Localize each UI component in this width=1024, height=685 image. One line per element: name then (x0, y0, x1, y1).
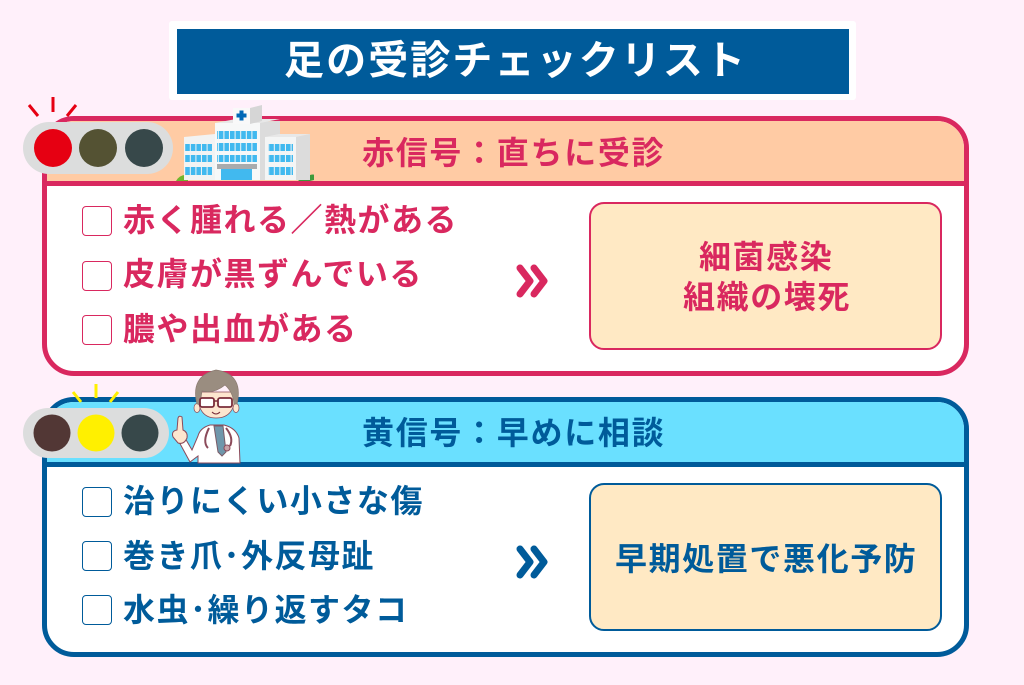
icon: yellow traffic light (23, 384, 169, 458)
icon: hospital building (176, 105, 314, 181)
yellow checklist: 治りにくい小さな傷 (123, 483, 424, 519)
red checklist (82, 202, 458, 347)
red checklist: 赤く腫れる／熱がある (123, 202, 458, 238)
red heading: 赤信号：直ちに受診 (362, 135, 665, 171)
icon: red traffic light (23, 97, 173, 174)
panel: red signal: 組織の壊死 (683, 279, 851, 315)
arrow: blue chevrons (516, 546, 548, 578)
title banner (169, 21, 856, 100)
red checklist: 皮膚が黒ずんでいる (123, 256, 423, 292)
red result box (589, 202, 942, 350)
yellow result text: 早期処置で悪化予防 (615, 541, 917, 577)
yellow checklist: 巻き爪･外反母趾 (123, 538, 375, 574)
title text: 足の受診チェックリスト (284, 39, 747, 83)
red result text: 細菌感染 (699, 239, 833, 275)
yellow checklist: 水虫･繰り返すタコ (123, 592, 409, 628)
yellow result box (589, 483, 942, 631)
yellow heading: 黄信号：早めに相談 (362, 415, 665, 451)
yellow checklist (82, 483, 424, 628)
icon: doctor pointing (172, 370, 240, 464)
arrow: red chevrons (516, 264, 548, 298)
panel: yellow signal (42, 397, 969, 657)
panel: red signal (42, 116, 969, 376)
red checklist: 膿や出血がある (123, 311, 358, 347)
